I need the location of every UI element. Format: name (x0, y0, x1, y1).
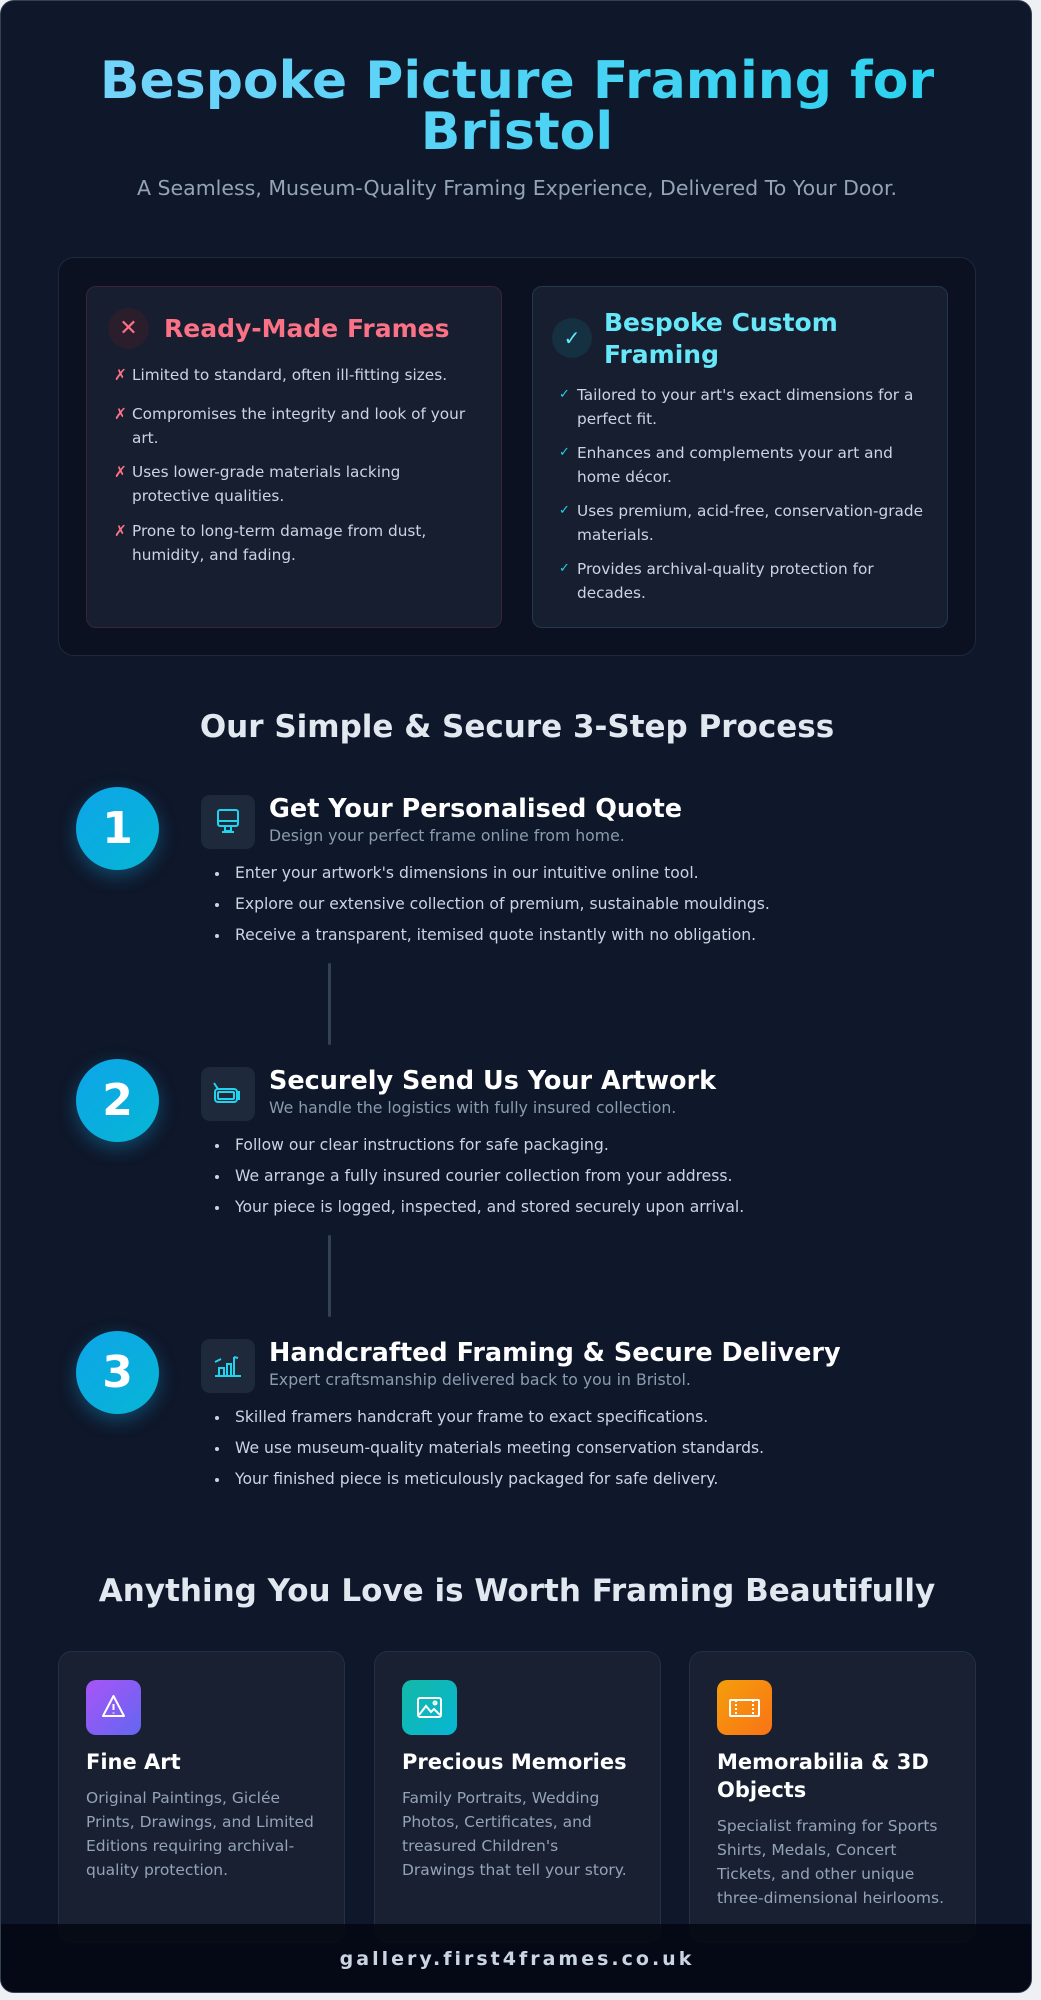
step 2 bullets (215, 1136, 744, 1216)
heading: ready-made: Ready-Made Frames (164, 314, 450, 343)
title: Bristol (421, 102, 613, 162)
title: precious memories: Precious Memories (402, 1750, 627, 1774)
step 1 title: Get Your Personalised Quote (269, 794, 682, 824)
step 2 subtitle: We handle the logistics with fully insured collection. (269, 1098, 676, 1117)
list: cons: ✗ (114, 522, 127, 540)
step 2 title: Securely Send Us Your Artwork (269, 1066, 716, 1096)
panel: comparison (58, 257, 976, 656)
step 3 bullets: Your finished piece is meticulously packaged for safe delivery. (235, 1470, 718, 1488)
step 2 bullets: We arrange a fully insured courier collection from your address. (235, 1167, 732, 1185)
step 3 icon: workshop (201, 1339, 255, 1393)
list: cons: Uses lower-grade materials lacking protective qualities. (132, 463, 400, 505)
heading: process: Our Simple & Secure 3-Step Process (200, 709, 834, 745)
list: cons: Limited to standard, often ill-fitting sizes. (132, 366, 447, 384)
card: precious memories (374, 1651, 661, 1943)
footer (1, 1924, 1033, 1994)
title (1, 56, 1033, 158)
list: pros: Tailored to your art's exact dimensions for a perfect fit. (577, 386, 913, 428)
heading: bespoke: Bespoke Custom (604, 308, 838, 337)
step 3 subtitle: Expert craftsmanship delivered back to you in Bristol. (269, 1370, 691, 1389)
list: pros (559, 386, 923, 602)
step 1 subtitle: Design your perfect frame online from home. (269, 826, 625, 845)
step 3 bullets: We use museum-quality materials meeting conservation standards. (235, 1439, 764, 1457)
desc: precious memories: Family Portraits, Wedding Photos, Certificates, and treasured Children's Drawings that tell your story. (402, 1789, 627, 1879)
step 1 bullets (215, 864, 770, 944)
panel: bespoke custom framing (532, 286, 948, 628)
step 1 bullets: Explore our extensive collection of premium, sustainable mouldings. (235, 895, 770, 913)
title: Bespoke Picture Framing for (100, 51, 934, 111)
icon: photo (402, 1680, 457, 1735)
icon: cross (108, 308, 149, 349)
footer: gallery.first4frames.co.uk (340, 1948, 694, 1970)
list: pros: ✓ (559, 561, 570, 576)
list: pros: Enhances and complements your art and home décor. (577, 444, 893, 486)
icon: ticket (717, 1680, 772, 1735)
icon: cross: ✕ (119, 316, 138, 341)
panel: ready-made frames (86, 286, 502, 628)
list: cons: ✗ (114, 463, 127, 481)
step 1 number: 1 (102, 803, 133, 854)
list: pros: Uses premium, acid-free, conservation-grade materials. (577, 502, 923, 544)
list: cons: ✗ (114, 405, 127, 423)
heading: anything you love: Anything You Love is Worth Framing Beautifully (99, 1573, 935, 1609)
connector 1 (328, 963, 331, 1045)
step 3 title: Handcrafted Framing & Secure Delivery (269, 1338, 841, 1368)
desc: memorabilia: Specialist framing for Sports Shirts, Medals, Concert Tickets, and other unique three-dimensional heirlooms. (717, 1817, 944, 1907)
list: pros: ✓ (559, 503, 570, 518)
step 2 bullets: Follow our clear instructions for safe packaging. (235, 1136, 609, 1154)
card: fine art (58, 1651, 345, 1943)
step 2 number: 2 (102, 1075, 133, 1126)
list: cons: Prone to long-term damage from dust, humidity, and fading. (132, 522, 426, 564)
step 3 number: 3 (102, 1347, 133, 1398)
step 1 bullets: Enter your artwork's dimensions in our intuitive online tool. (235, 864, 699, 882)
list: cons (114, 366, 466, 564)
connector 2 (328, 1235, 331, 1317)
subtitle: A Seamless, Museum-Quality Framing Experience, Delivered To Your Door. (137, 176, 897, 200)
step 2 icon: courier (201, 1067, 255, 1121)
list: pros: ✓ (559, 387, 570, 402)
title: memorabilia: Memorabilia & 3D Objects (717, 1750, 929, 1802)
list: cons: Compromises the integrity and look of your art. (132, 405, 465, 447)
icon: check (552, 318, 592, 358)
step 2 bullets: Your piece is logged, inspected, and stored securely upon arrival. (235, 1198, 744, 1216)
step 3 bullets: Skilled framers handcraft your frame to exact specifications. (235, 1408, 708, 1426)
list: pros: Provides archival-quality protection for decades. (577, 560, 874, 602)
step 3 bullets (215, 1408, 764, 1488)
step 3 number (76, 1331, 159, 1414)
heading: bespoke (604, 308, 838, 369)
list: pros: ✓ (559, 445, 570, 460)
icon: check: ✓ (564, 326, 580, 350)
step 2 number (76, 1059, 159, 1142)
step 1 number (76, 787, 159, 870)
title: fine art: Fine Art (86, 1750, 181, 1774)
card: memorabilia (689, 1651, 976, 1943)
icon: fine art (86, 1680, 141, 1735)
step 1 icon: monitor (201, 795, 255, 849)
step 1 bullets: Receive a transparent, itemised quote instantly with no obligation. (235, 926, 756, 944)
list: cons: ✗ (114, 366, 127, 384)
heading: bespoke: Framing (604, 340, 719, 369)
desc: fine art: Original Paintings, Giclée Prints, Drawings, and Limited Editions requiring archival-quality protection. (86, 1789, 314, 1879)
